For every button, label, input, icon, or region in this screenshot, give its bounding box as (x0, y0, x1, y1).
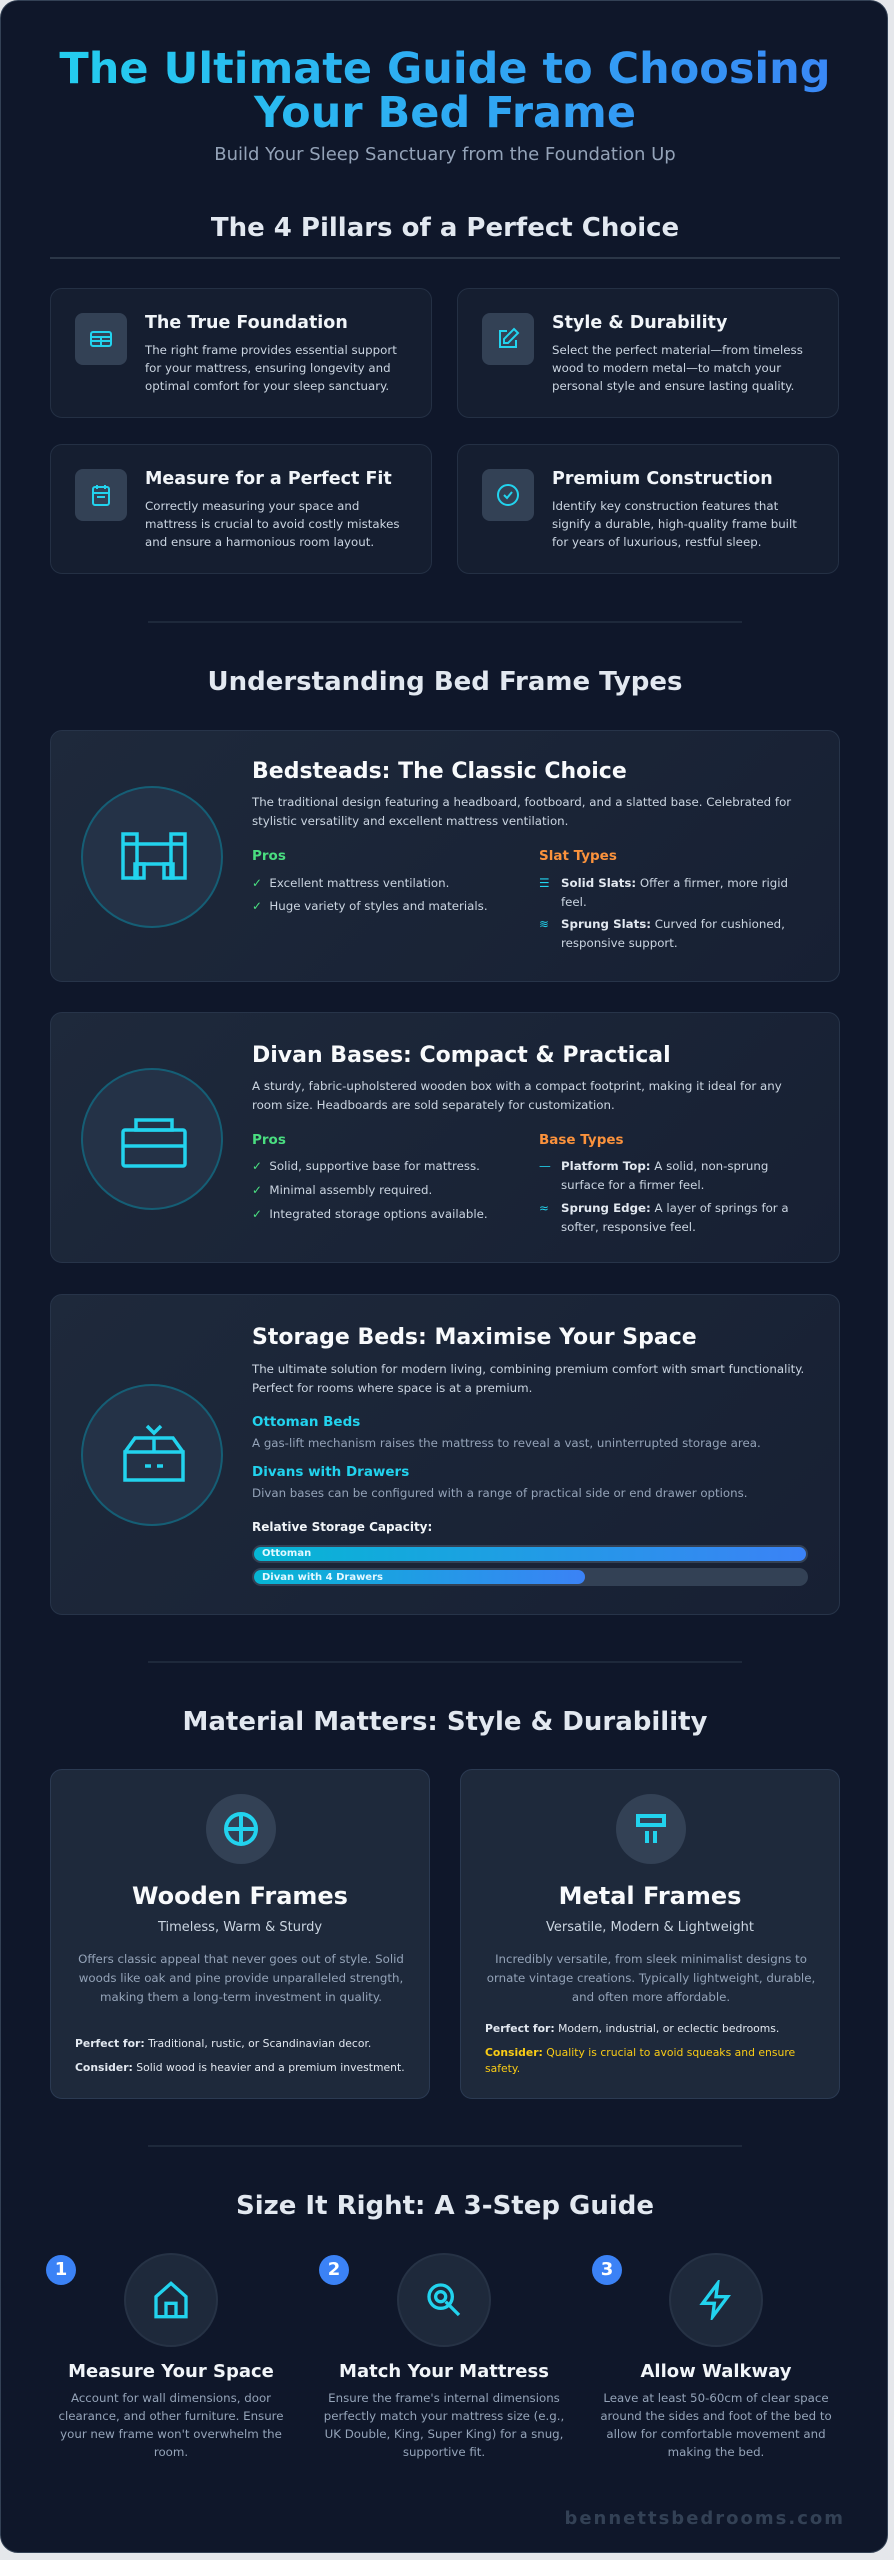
panel: pillar construction: Premium Construction (552, 469, 773, 489)
panel: storage: Ottoman Beds (252, 1414, 360, 1430)
panel: wooden (50, 1769, 430, 2099)
panel: pillar style: Style & Durability (552, 313, 727, 333)
panel: divan: ≈ (539, 1201, 549, 1215)
panel: metal: Versatile, Modern & Lightweight (546, 1920, 754, 1935)
icon: bolt (669, 2253, 763, 2347)
panel: pillar style (457, 288, 839, 418)
badge 2: 2 (328, 2259, 340, 2280)
footer brand: bennettsbedrooms.com (564, 2508, 845, 2529)
badge 2 (319, 2255, 349, 2285)
panel: pillar foundation: The right frame provides essential support for your mattress, ensuring longevity and optimal comfort for your sleep sanctuary. (145, 343, 397, 393)
heading: pillars: The 4 Pillars of a Perfect Choice (211, 213, 679, 243)
panel: divan: Divan Bases: Compact & Practical (252, 1043, 671, 1068)
panel: divan: Sprung Edge: A layer of springs for a softer, responsive feel. (561, 1201, 789, 1234)
panel: storage: Relative Storage Capacity: (252, 1520, 432, 1534)
panel: bedsteads: The traditional design featuring a headboard, footboard, and a slatted base. Celebrated for stylistic versatility and excellent mattress ventilation. (252, 795, 791, 828)
panel: divan: ✓ Minimal assembly required. (252, 1183, 432, 1197)
panel: divan: Base Types (539, 1132, 624, 1148)
bar chart: Divan with 4 Drawers (262, 1572, 383, 1583)
bar chart: Ottoman (262, 1548, 311, 1559)
step 2 (324, 2253, 564, 2459)
text: Allow Walkway (640, 2361, 792, 2382)
panel: wooden: Wooden Frames (132, 1882, 348, 1910)
panel: storage: Divans with Drawers (252, 1464, 409, 1480)
panel: bedsteads: ✓ Excellent mattress ventilation. (252, 876, 449, 890)
panel: wooden: Consider: Solid wood is heavier and a premium investment. (75, 2061, 405, 2074)
bar chart (252, 1545, 808, 1586)
icon: metal (616, 1794, 686, 1864)
panel: divan: ✓ Solid, supportive base for mattress. (252, 1159, 480, 1173)
panel: bedsteads: Solid Slats: Offer a firmer, more rigid feel. (561, 876, 788, 909)
panel: divan: A sturdy, fabric-upholstered wooden box with a compact footprint, making it ideal for any room size. Headboards are sold separately for customization. (252, 1079, 782, 1112)
icon: layout (75, 313, 127, 365)
badge 1 (46, 2255, 76, 2285)
panel: wooden: Perfect for: Traditional, rustic, or Scandinavian decor. (75, 2037, 371, 2050)
step 1 (58, 2253, 284, 2459)
panel: pillar construction (457, 444, 839, 574)
panel: bedsteads: Slat Types (539, 848, 617, 864)
icon: search (397, 2253, 491, 2347)
text: Ensure the frame's internal dimensions perfectly match your mattress size (e.g., UK Double, King, Super King) for a snug, supportive fit. (324, 2391, 564, 2459)
text: Leave at least 50-60cm of clear space around the sides and foot of the bed to allow for comfortable movement and making the bed. (600, 2391, 832, 2459)
panel: pillar measure: Measure for a Perfect Fit (145, 469, 392, 489)
panel: bedsteads: Sprung Slats: Curved for cushioned, responsive support. (561, 917, 785, 950)
panel: pillar construction: Identify key construction features that signify a durable, high-quality frame built for years of luxurious, restful sleep. (552, 499, 797, 549)
panel: pillar style: Select the perfect material—from timeless wood to modern metal—to match your personal style and ensure lasting quality. (552, 343, 803, 393)
text: Match Your Mattress (339, 2361, 549, 2382)
panel: bedsteads: Pros (252, 848, 286, 864)
panel: divan: ✓ Integrated storage options available. (252, 1207, 488, 1221)
text: Account for wall dimensions, door clearance, and other furniture. Ensure your new frame won't overwhelm the room. (58, 2391, 284, 2459)
panel: metal: Perfect for: Modern, industrial, or eclectic bedrooms. (485, 2022, 779, 2035)
panel: wooden: Timeless, Warm & Sturdy (158, 1920, 322, 1935)
panel: wooden: Offers classic appeal that never goes out of style. Solid woods like oak and pine provide unparalleled strength, making them a long-term investment in quality. (78, 1952, 404, 2004)
panel: metal: Metal Frames (559, 1882, 741, 1910)
icon: storage box (81, 1384, 223, 1526)
icon: pencil (482, 313, 534, 365)
panel: storage: The ultimate solution for modern living, combining premium comfort with smart functionality. Perfect for rooms where space is at a premium. (252, 1362, 804, 1395)
panel: storage: A gas-lift mechanism raises the mattress to reveal a vast, uninterrupted storage area. (252, 1436, 761, 1450)
panel: metal (460, 1769, 840, 2099)
panel: pillar measure (50, 444, 432, 574)
badge 3: 3 (601, 2259, 613, 2280)
icon: calendar (75, 469, 127, 521)
icon: bedstead (81, 786, 223, 928)
panel: pillar foundation: The True Foundation (145, 313, 348, 333)
heading: materials: Material Matters: Style & Durability (182, 1707, 708, 1737)
text: Measure Your Space (68, 2361, 274, 2382)
icon: check circle (482, 469, 534, 521)
icon: divan (81, 1068, 223, 1210)
title (1, 47, 889, 135)
panel: storage: Storage Beds: Maximise Your Space (252, 1325, 697, 1350)
panel: bedsteads: Bedsteads: The Classic Choice (252, 759, 627, 784)
panel: divan: Pros (252, 1132, 286, 1148)
panel: divan: — (539, 1159, 551, 1173)
panel: metal: Incredibly versatile, from sleek minimalist designs to ornate vintage creations. Typically lightweight, durable, and often more affordable. (487, 1952, 815, 2004)
heading: size guide: Size It Right: A 3-Step Guide (236, 2191, 654, 2221)
panel: bedsteads: ☰ (539, 876, 550, 890)
title: The Ultimate Guide to Choosing (59, 44, 831, 94)
panel: storage: Divan bases can be configured with a range of practical side or end drawer options. (252, 1486, 748, 1500)
panel: divan: Platform Top: A solid, non-sprung surface for a firmer feel. (561, 1159, 768, 1192)
subtitle: Build Your Sleep Sanctuary from the Foundation Up (214, 144, 676, 165)
badge 1: 1 (55, 2259, 67, 2280)
panel: pillar measure: Correctly measuring your space and mattress is crucial to avoid costly mistakes and ensure a harmonious room layout. (145, 499, 399, 549)
panel: bedsteads (50, 730, 840, 982)
badge 3 (592, 2255, 622, 2285)
panel: bedsteads: ✓ Huge variety of styles and materials. (252, 899, 488, 913)
icon: wood (206, 1794, 276, 1864)
step 3 (600, 2253, 832, 2459)
heading: types: Understanding Bed Frame Types (207, 667, 683, 697)
panel: divan (50, 1012, 840, 1263)
panel: bedsteads: ≋ (539, 917, 549, 931)
panel: storage (50, 1294, 840, 1615)
panel: metal: Consider: Quality is crucial to avoid squeaks and ensure safety. (485, 2046, 795, 2075)
panel: pillar foundation (50, 288, 432, 418)
title: Your Bed Frame (254, 88, 636, 138)
icon: house (124, 2253, 218, 2347)
